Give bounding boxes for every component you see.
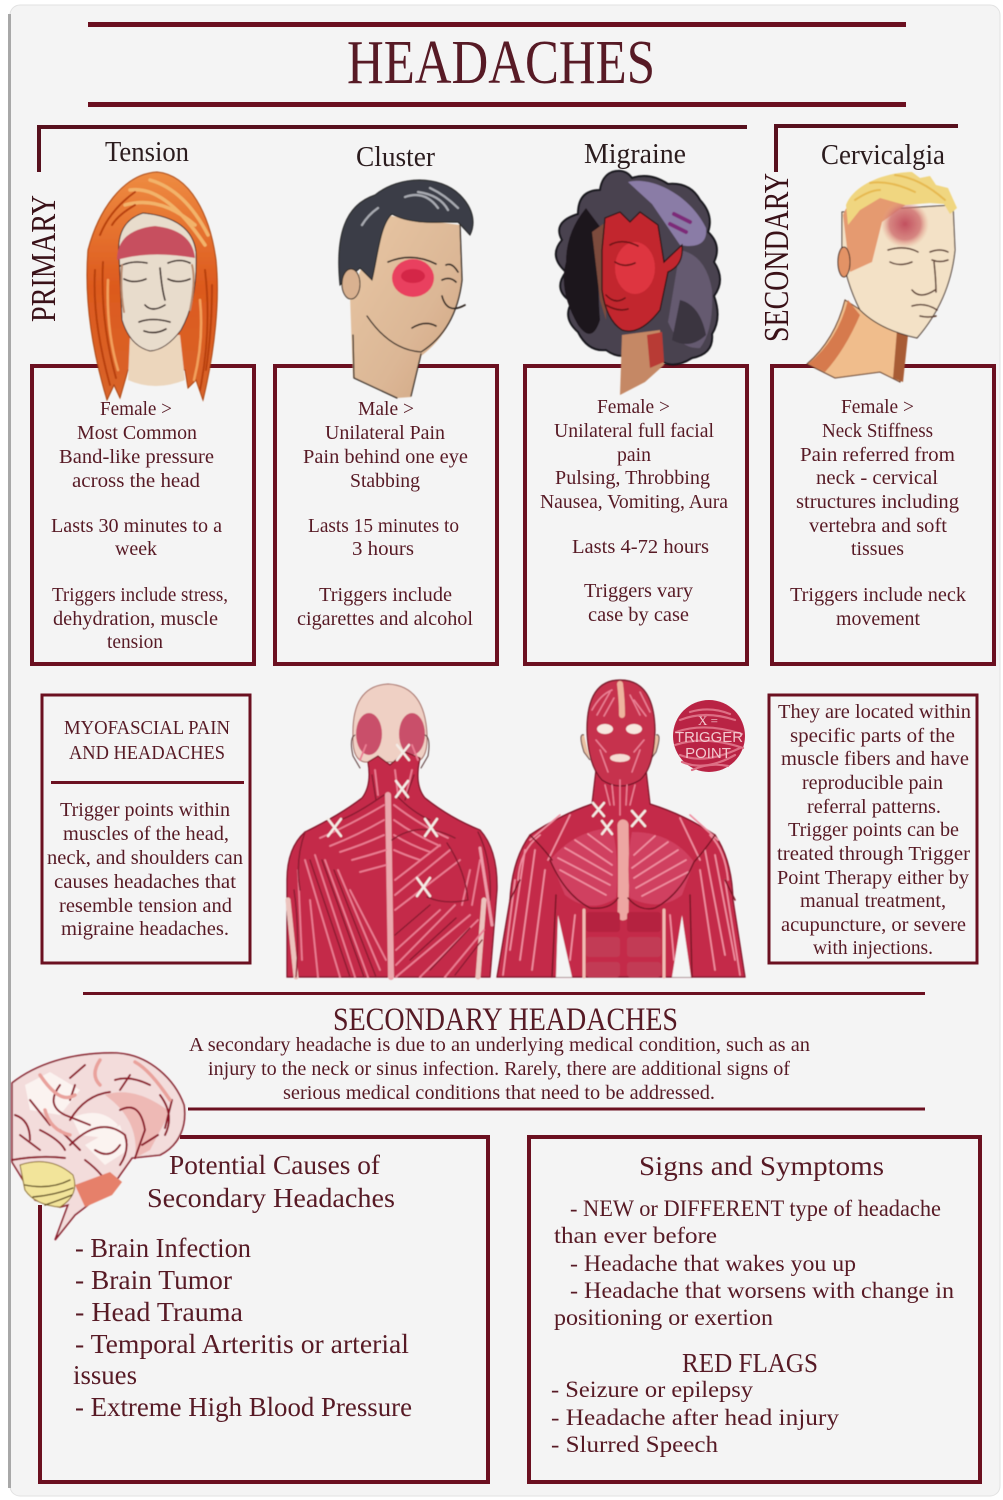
- heading: secondary headaches: [83, 992, 925, 1038]
- red flags list: - Slurred Speech: [551, 1432, 719, 1457]
- signs list: - NEW or DIFFERENT type of headache: [570, 1196, 941, 1221]
- panel: trigger point description: referral patterns.: [807, 796, 941, 818]
- panel: cluster: [275, 366, 497, 664]
- icon: tension head: [87, 172, 217, 400]
- signs list: - Headache that wakes you up: [570, 1251, 856, 1276]
- icon: cervicalgia head: [807, 172, 957, 382]
- causes heading: Secondary Headaches: [147, 1183, 395, 1213]
- secondary bracket and label: SECONDARY: [757, 173, 796, 342]
- panel: tension: Female >: [100, 398, 172, 420]
- panel: cluster: Lasts 15 minutes to: [308, 515, 459, 537]
- signs list: than ever before: [554, 1223, 717, 1248]
- panel: trigger point description: They are located within: [778, 701, 971, 723]
- text: secondary headache description: A secondary headache is due to an underlying medical condition, such as an: [189, 1034, 810, 1056]
- myofascial body text: Trigger points within: [60, 799, 230, 821]
- panel: tension: Band-like pressure: [59, 446, 214, 468]
- panel: cervicalgia: Triggers include neck: [790, 584, 966, 606]
- panel: tension: Triggers include stress,: [52, 584, 228, 606]
- panel: cervicalgia: Pain referred from: [800, 444, 955, 466]
- icon: migraine head: [556, 171, 720, 395]
- panel: trigger point description: reproducible pain: [802, 772, 943, 794]
- icon: brain: [12, 1053, 185, 1240]
- callout: trigger point key: TRIGGER: [675, 729, 743, 746]
- causes list: - Brain Infection: [75, 1233, 251, 1263]
- panel: migraine: pain: [617, 444, 651, 466]
- red flags list: - Headache after head injury: [551, 1405, 840, 1430]
- panel: migraine: Nausea, Vomiting, Aura: [540, 491, 728, 513]
- panel: trigger point description: Trigger points can be: [788, 819, 959, 841]
- primary bracket and label: PRIMARY: [24, 195, 63, 322]
- panel: tension: Lasts 30 minutes to a: [51, 515, 222, 537]
- red flags list: - Seizure or epilepsy: [551, 1377, 754, 1402]
- myofascial body text: causes headaches that: [54, 871, 236, 893]
- panel: tension: week: [115, 538, 157, 560]
- panel: cluster: Male >: [358, 398, 414, 420]
- panel: cervicalgia: structures including: [796, 491, 959, 513]
- panel: cluster: Pain behind one eye: [303, 446, 468, 468]
- causes heading: [147, 1150, 395, 1213]
- causes list: [73, 1233, 412, 1422]
- icon: cluster head: [339, 180, 473, 398]
- panel: migraine: Unilateral full facial: [554, 420, 714, 442]
- panel: migraine: Triggers vary: [584, 580, 693, 602]
- causes list: - Head Trauma: [75, 1297, 243, 1327]
- panel: migraine: Female >: [597, 396, 670, 418]
- panel: cluster: cigarettes and alcohol: [297, 608, 473, 630]
- headache type names: [105, 136, 945, 173]
- figure: back muscles: [287, 684, 497, 977]
- causes list: - Brain Tumor: [75, 1265, 232, 1295]
- text: secondary headache description: serious medical conditions that need to be addressed.: [283, 1082, 715, 1104]
- panel: cervicalgia: movement: [836, 608, 920, 630]
- callout: trigger point key: [673, 700, 745, 772]
- panel: trigger point description: muscle fibers and have: [781, 748, 969, 770]
- panel: tension: Most Common: [77, 422, 197, 444]
- myofascial body text: neck, and shoulders can: [47, 847, 243, 869]
- panel: tension: across the head: [72, 470, 200, 492]
- panel: cervicalgia: Female >: [841, 396, 914, 418]
- causes list: issues: [73, 1360, 137, 1390]
- secondary bracket and label: [757, 126, 958, 342]
- panel: tension: [32, 366, 254, 664]
- panel: trigger point description: treated through Trigger: [777, 843, 970, 865]
- panel: trigger point description: specific parts of the: [790, 725, 955, 747]
- panel: myofascial pain: [42, 695, 250, 963]
- heading: secondary headaches: SECONDARY HEADACHES: [333, 1002, 678, 1038]
- myofascial heading: AND HEADACHES: [69, 742, 225, 764]
- signs heading: Signs and Symptoms: [639, 1151, 884, 1181]
- callout: trigger point key: POINT: [685, 745, 731, 762]
- panel: trigger point description: Point Therapy either by: [777, 867, 969, 889]
- signs list: positioning or exertion: [554, 1305, 774, 1330]
- myofascial body text: [47, 799, 243, 940]
- title: HEADACHES: [347, 29, 655, 97]
- primary bracket and label: [24, 127, 747, 322]
- panel: migraine: Lasts 4-72 hours: [572, 536, 709, 558]
- panel: cluster: Triggers include: [319, 584, 452, 606]
- panel: cervicalgia: tissues: [851, 538, 904, 560]
- myofascial body text: resemble tension and: [59, 895, 232, 917]
- panel: cluster: 3 hours: [352, 538, 414, 560]
- callout: trigger point key: X =: [698, 713, 718, 728]
- causes list: - Temporal Arteritis or arterial: [75, 1329, 409, 1359]
- headache type names: Tension: [105, 136, 189, 168]
- panel: cervicalgia: Neck Stiffness: [822, 420, 933, 442]
- myofascial heading: MYOFASCIAL PAIN: [64, 717, 230, 739]
- panel: trigger point description: with injections.: [813, 937, 933, 959]
- causes heading: Potential Causes of: [169, 1150, 380, 1180]
- panel: migraine: Pulsing, Throbbing: [555, 467, 710, 489]
- panel: migraine: case by case: [588, 604, 689, 626]
- panel: signs and symptoms: [529, 1137, 980, 1482]
- headache type names: Migraine: [584, 138, 686, 170]
- panel: migraine: [525, 366, 747, 664]
- panel: cluster: Unilateral Pain: [325, 422, 445, 444]
- trigger point marks: front: [593, 803, 645, 834]
- title: [88, 22, 906, 107]
- myofascial heading: [64, 717, 230, 764]
- panel: cervicalgia: [772, 366, 994, 664]
- red flags list: [551, 1377, 840, 1457]
- panel: cluster: Stabbing: [350, 470, 420, 492]
- panel: tension: tension: [107, 631, 163, 653]
- panel: trigger point description: manual treatment,: [800, 890, 946, 912]
- text: secondary headache description: [189, 1034, 810, 1104]
- panel: trigger point description: [769, 695, 977, 963]
- figure: front muscles: [497, 680, 745, 977]
- panel: cervicalgia: neck - cervical: [816, 467, 938, 489]
- causes list: - Extreme High Blood Pressure: [75, 1392, 412, 1422]
- text: secondary headache description: injury to the neck or sinus infection. Rarely, there are additional signs of: [208, 1058, 790, 1080]
- myofascial body text: migraine headaches.: [61, 918, 229, 940]
- myofascial body text: muscles of the head,: [63, 823, 229, 845]
- headache type names: Cluster: [356, 141, 435, 173]
- panel: potential causes: [40, 1109, 925, 1482]
- red flags heading: RED FLAGS: [682, 1348, 818, 1378]
- headache type names: Cervicalgia: [821, 139, 945, 171]
- signs list: - Headache that worsens with change in: [570, 1278, 955, 1303]
- trigger point marks: back: [328, 745, 437, 896]
- panel: tension: dehydration, muscle: [53, 608, 218, 630]
- panel: cervicalgia: vertebra and soft: [809, 515, 947, 537]
- abdominal muscles: [584, 910, 664, 977]
- panel: trigger point description: acupuncture, or severe: [781, 914, 966, 936]
- signs list: [554, 1196, 955, 1330]
